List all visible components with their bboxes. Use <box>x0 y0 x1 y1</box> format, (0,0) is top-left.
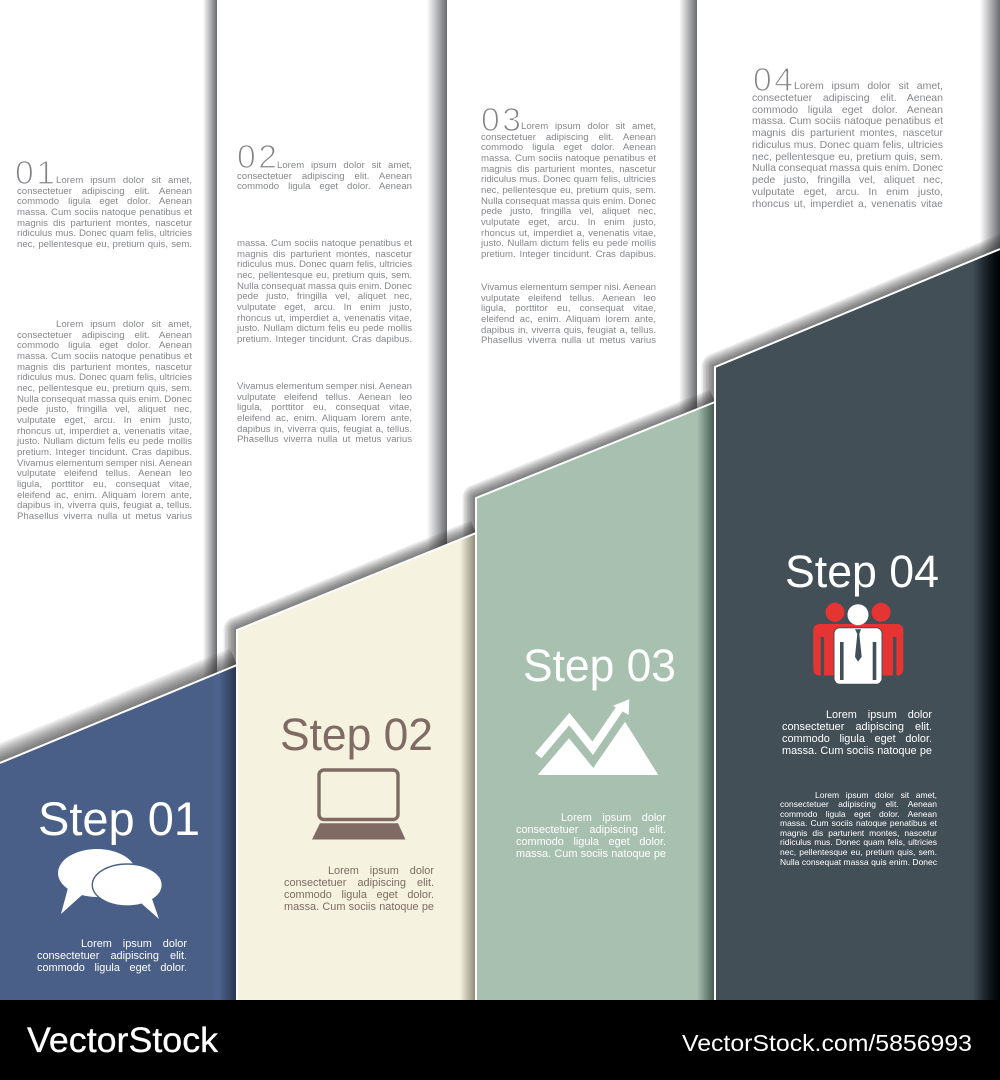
text: step 02 description: consectetuer adipiscing elit. <box>284 877 434 889</box>
text: column 3 first block: Lorem ipsum dolor sit amet, <box>521 121 656 132</box>
text: step 04 small block: ridiculus mus. Donec quam felis, ultricies <box>780 837 937 847</box>
text: column 1 second block: consectetuer adipiscing elit. Aenean <box>17 330 192 341</box>
text: column 2 second block: vulputate eget, arcu. In enim justo, <box>237 302 412 313</box>
text: column 1 second block <box>16 319 192 522</box>
heading: step 03: Step 03 <box>523 640 676 691</box>
heading: step 01: Step 01 <box>38 792 200 845</box>
text: column 1 second block: vulputate eget, arcu. In enim justo, <box>17 415 192 426</box>
text: step 03 description: massa. Cum sociis natoque pe <box>516 848 666 860</box>
text: column 1 second block: pretium. Integer tincidunt. Cras dapibus. <box>17 447 192 458</box>
text: column 2 second block: pretium. Integer tincidunt. Cras dapibus. <box>237 334 412 345</box>
number 02: 02 <box>237 139 280 176</box>
text: step 04 description <box>782 709 932 757</box>
text: column 3 second block <box>481 282 656 346</box>
text: column 4 block: pede justo, fringilla vel, aliquet nec, <box>752 174 943 186</box>
text: column 1 second block: Vivamus elementum semper nisi. Aenean <box>17 458 192 469</box>
text: column 2 third block: dapibus in, viverra quis, feugiat a, tellus. <box>237 424 412 435</box>
number 03: 03 <box>481 102 524 139</box>
text: column 4 block: massa. Cum sociis natoque penatibus et <box>752 115 943 127</box>
text: column 1 first block: commodo ligula eget dolor. Aenean <box>17 196 192 207</box>
brand logo text: VectorStock <box>27 1021 219 1060</box>
shadow above step 01 panel <box>0 665 237 771</box>
text: column 2 third block: Vivamus elementum semper nisi. Aenean <box>237 381 412 392</box>
text: column 3 second block: Phasellus viverra nulla ut metus varius <box>481 335 656 346</box>
panel: step 04 <box>715 248 1000 1000</box>
number 01: 01 <box>15 155 58 192</box>
text: step 04 description: commodo ligula eget dolor. <box>782 733 932 745</box>
text: column 3 first block: justo. Nullam dictum felis eu pede mollis <box>481 238 656 249</box>
text: column 1 second block: pede justo, fringilla vel, aliquet nec, <box>17 404 192 415</box>
icon: rising chart over mountains <box>538 699 658 775</box>
text: column 3 first block: magnis dis parturient montes, nascetur <box>481 164 656 175</box>
text: column 3 first block: consectetuer adipiscing elit. Aenean <box>481 132 656 143</box>
text: column 2 third block: ligula, porttitor eu, consequat vitae, <box>237 402 412 413</box>
text: column 2 third block: eleifend ac, enim. Aliquam lorem ante, <box>237 413 412 424</box>
text: column 1 second block: justo. Nullam dictum felis eu pede mollis <box>17 436 192 447</box>
text: step 04 small block: nec, pellentesque eu, pretium quis, sem. <box>780 847 937 857</box>
panel: step 02 <box>237 533 476 1000</box>
text: column 2 first block: Lorem ipsum dolor sit amet, <box>277 160 412 171</box>
text: column 1 second block: ligula, porttitor eu, consequat vitae, <box>17 479 192 490</box>
text: step 03 description: consectetuer adipiscing elit. <box>516 824 666 836</box>
text: step 03 description <box>516 812 666 860</box>
text: column 1 first block: consectetuer adipiscing elit. Aenean <box>17 186 192 197</box>
text: column 4 block: vulputate eget, arcu. In enim justo, <box>752 186 943 198</box>
shadow around step 04 panel <box>715 236 1000 410</box>
text: column 1 second block: dapibus in, viverra quis, feugiat a, tellus. <box>17 500 192 511</box>
text: column 2 second block: rhoncus ut, imperdiet a, venenatis vitae, <box>237 313 412 324</box>
text: column 3 second block: Vivamus elementum semper nisi. Aenean <box>481 282 656 293</box>
text: column 3 second block: ligula, porttitor eu, consequat vitae, <box>481 303 656 314</box>
text: step 04 small block: magnis dis parturient montes, nascetur <box>780 828 937 838</box>
text: step 04 small block: consectetuer adipiscing elit. Aenean <box>780 799 937 809</box>
text: step 01 description: commodo ligula eget dolor. <box>37 962 187 974</box>
text: column 4 block: commodo ligula eget dolor. Aenean <box>752 104 943 116</box>
text: step 03 description: commodo ligula eget dolor. <box>516 836 666 848</box>
text: column 3 first block: massa. Cum sociis natoque penatibus et <box>481 153 656 164</box>
text: step 01 description: consectetuer adipiscing elit. <box>37 950 187 962</box>
text: column 4 block <box>752 80 943 210</box>
text: step 01 description: Lorem ipsum dolor <box>81 938 187 950</box>
text: column 1 first block: ridiculus mus. Donec quam felis, ultricies <box>17 228 192 239</box>
text: column 4 block: ridiculus mus. Donec quam felis, ultricies <box>752 139 943 151</box>
panel: step 01 <box>0 665 237 1000</box>
icon: speech bubbles <box>58 849 162 919</box>
text: column 4 block: consectetuer adipiscing elit. Aenean <box>752 92 943 104</box>
text: column 3 second block: eleifend ac, enim. Aliquam lorem ante, <box>481 314 656 325</box>
text: column 2 first block: consectetuer adipiscing elit. Aenean <box>237 171 412 182</box>
text: column 3 first block: Nulla consequat massa quis enim. Donec <box>481 196 656 207</box>
text: column 3 first block: nec, pellentesque eu, pretium quis, sem. <box>481 185 656 196</box>
text: column 1 second block: ridiculus mus. Donec quam felis, ultricies <box>17 372 192 383</box>
text: step 02 description <box>284 865 434 913</box>
text: column 3 first block: vulputate eget, arcu. In enim justo, <box>481 217 656 228</box>
text: column 1 second block: commodo ligula eget dolor. Aenean <box>17 340 192 351</box>
text: column 1 first block: Lorem ipsum dolor sit amet, <box>56 175 192 186</box>
text: column 1 first block: magnis dis parturient montes, nascetur <box>17 218 192 229</box>
text: step 04 small block: massa. Cum sociis natoque penatibus et <box>780 818 937 828</box>
text: column 2 third block: vulputate eleifend tellus. Aenean leo <box>237 392 412 403</box>
text: column 3 first block: pretium. Integer tincidunt. Cras dapibus. <box>481 249 656 260</box>
text: column 1 second block: Nulla consequat massa quis enim. Donec <box>17 394 192 405</box>
text: step 02 description: Lorem ipsum dolor <box>328 865 434 877</box>
text: column 4 block: Lorem ipsum dolor sit amet, <box>794 80 943 92</box>
text: column 4 block: Nulla consequat massa quis enim. Donec <box>752 162 943 174</box>
text: column 2 second block: magnis dis parturient montes, nascetur <box>237 249 412 260</box>
text: step 04 description: massa. Cum sociis natoque pe <box>782 745 932 757</box>
shadow around step 02 panel <box>237 533 476 672</box>
text: column 4 block: nec, pellentesque eu, pretium quis, sem. <box>752 150 943 162</box>
text: column 2 second block <box>236 238 412 345</box>
shadow around step 03 panel <box>476 402 715 540</box>
text: column 4 block: rhoncus ut, imperdiet a, venenatis vitae <box>752 198 943 210</box>
text: column 1 second block: eleifend ac, enim. Aliquam lorem ante, <box>17 490 192 500</box>
text: column 2 second block: Nulla consequat massa quis enim. Donec <box>237 281 412 292</box>
text: column 2 third block <box>237 381 412 445</box>
text: step 04 small block: Lorem ipsum dolor sit amet, <box>815 790 937 800</box>
heading: step 04: Step 04 <box>785 546 939 597</box>
text: column 3 second block: dapibus in, viverra quis, feugiat a, tellus. <box>481 325 656 336</box>
text: column 3 first block: commodo ligula eget dolor. Aenean <box>481 142 656 153</box>
number 04: 04 <box>753 62 796 99</box>
text: column 2 second block: justo. Nullam dictum felis eu pede mollis <box>237 323 412 334</box>
text: column 2 second block: massa. Cum sociis natoque penatibus et <box>237 238 412 249</box>
text: column 1 second block: Lorem ipsum dolor sit amet, <box>56 319 192 330</box>
text: step 04 description: consectetuer adipiscing elit. <box>782 721 932 733</box>
text: column 3 second block: vulputate eleifend tellus. Aenean leo <box>481 293 656 304</box>
icon: team of people <box>813 603 903 684</box>
text: step 04 small block: Nulla consequat massa quis enim. Donec <box>780 857 937 867</box>
text: column 2 second block: ridiculus mus. Donec quam felis, ultricies <box>237 259 412 270</box>
text: column 3 first block: ridiculus mus. Donec quam felis, ultricies <box>481 174 656 185</box>
text: column 2 first block: commodo ligula eget dolor. Aenean <box>237 181 412 192</box>
text: step 04 description: Lorem ipsum dolor <box>826 709 932 721</box>
text: column 1 second block: rhoncus ut, imperdiet a, venenatis vitae, <box>17 426 192 437</box>
text: column 1 second block: massa. Cum sociis natoque penatibus et <box>17 351 192 362</box>
text: column 3 first block <box>480 121 656 260</box>
text: column 2 second block: nec, pellentesque eu, pretium quis, sem. <box>237 270 412 281</box>
heading: step 02: Step 02 <box>280 709 433 760</box>
text: column 1 second block: vulputate eleifend tellus. Aenean leo <box>17 468 192 479</box>
text: column 1 first block: nec, pellentesque eu, pretium quis, sem. <box>17 239 192 250</box>
text: column 3 first block: pede justo, fringilla vel, aliquet nec, <box>481 206 656 217</box>
text: column 1 second block: Phasellus viverra nulla ut metus varius <box>17 511 192 522</box>
text: column 3 first block: rhoncus ut, imperdiet a, venenatis vitae, <box>481 228 656 239</box>
text: step 01 description <box>37 938 187 974</box>
text: step 02 description: commodo ligula eget dolor. <box>284 889 434 901</box>
text: step 02 description: massa. Cum sociis natoque pe <box>284 901 434 913</box>
text: column 1 second block: magnis dis parturient montes, nascetur <box>17 362 192 373</box>
footer bar <box>0 1000 1000 1080</box>
text: step 03 description: Lorem ipsum dolor <box>561 812 666 824</box>
text: column 1 first block: massa. Cum sociis natoque penatibus et <box>17 207 192 218</box>
text: column 2 second block: pede justo, fringilla vel, aliquet nec, <box>237 291 412 302</box>
text: column 2 third block: Phasellus viverra nulla ut metus varius <box>237 434 412 445</box>
text: column 2 first block <box>237 160 412 192</box>
text: column 1 first block <box>17 175 192 250</box>
text: column 1 second block: nec, pellentesque eu, pretium quis, sem. <box>17 383 192 394</box>
text: step 04 small block <box>780 790 937 867</box>
text: column 4 block: magnis dis parturient montes, nascetur <box>752 127 943 139</box>
image id text: VectorStock.com/5856993 <box>682 1030 972 1056</box>
text: step 04 small block: commodo ligula eget dolor. Aenean <box>780 809 937 819</box>
panel: step 03 <box>476 402 715 1000</box>
icon: laptop <box>312 770 406 840</box>
